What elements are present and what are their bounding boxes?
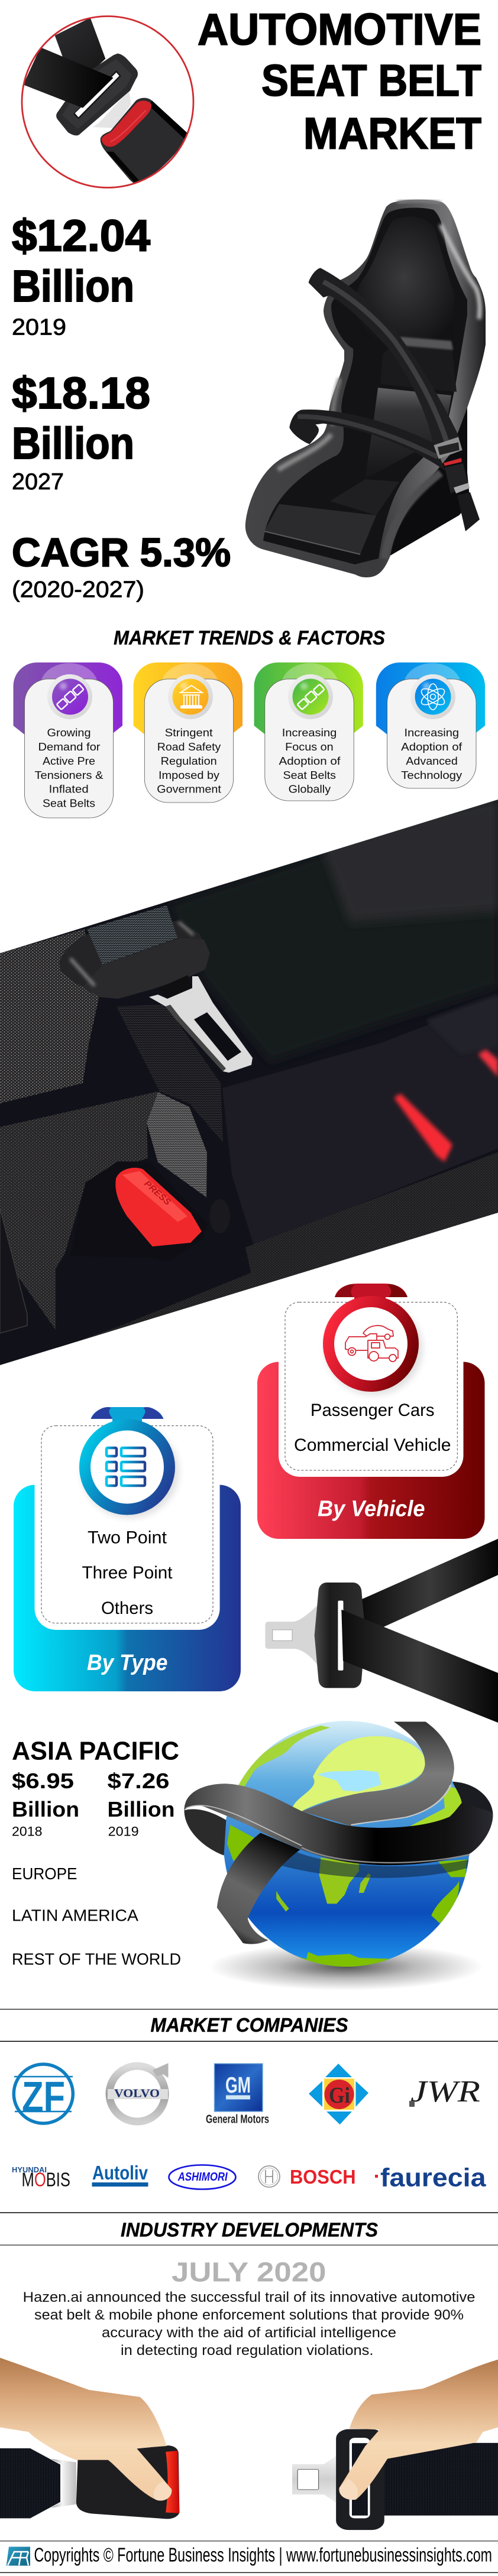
panel: trend card 3 bbox=[254, 662, 363, 801]
illustration: racing seat with belt bbox=[245, 200, 486, 577]
text: stringent regulation bbox=[157, 726, 221, 795]
logo: Gi diamond: Gi bbox=[329, 2083, 350, 2108]
heading: industry developments: INDUSTRY DEVELOPMENTS bbox=[121, 2218, 378, 2241]
stat: 2027 market size: $18.18 bbox=[12, 368, 150, 418]
icon: Fortune Business Insights logo bbox=[7, 2547, 30, 2566]
stat: CAGR: CAGR 5.3% bbox=[12, 530, 231, 575]
panel: by vehicle bbox=[257, 1284, 485, 1539]
stat: CAGR: (2020-2027) bbox=[12, 577, 144, 603]
text: vehicle types: Commercial Vehicle bbox=[294, 1435, 451, 1455]
panel: trend card 1 bbox=[13, 662, 122, 818]
heading: market companies: MARKET COMPANIES bbox=[150, 2014, 348, 2036]
icon: vehicles bbox=[345, 1326, 398, 1362]
icon: government building bbox=[180, 686, 202, 708]
logo: Hyundai Mobis: MOBIS bbox=[21, 2169, 70, 2191]
text: increasing focus: Increasing bbox=[282, 726, 337, 739]
text: vehicle types bbox=[294, 1401, 451, 1455]
text: growing demand: Demand for bbox=[38, 740, 101, 753]
text: belt types: Two Point bbox=[88, 1528, 167, 1547]
logo: General Motors: General Motors bbox=[206, 2113, 269, 2126]
illustration: belt and latch plate bbox=[265, 1539, 498, 1723]
region list bbox=[12, 1864, 181, 1968]
divider top of market companies bbox=[0, 2009, 498, 2010]
text block: development description: in detecting road regulation violations. bbox=[121, 2343, 374, 2359]
icon: seat belt buckle in red circle bbox=[22, 17, 193, 188]
illustration: globe wrapped in belt bbox=[184, 1721, 493, 1990]
logo: Gi diamond bbox=[309, 2064, 368, 2125]
divider below market companies heading bbox=[0, 2041, 498, 2042]
text: increasing focus: Seat Belts bbox=[283, 769, 336, 781]
icon: list bbox=[106, 1448, 145, 1486]
text: advanced technology bbox=[401, 726, 463, 781]
text: growing demand: Tensioners & bbox=[34, 769, 104, 781]
text: advanced technology: Adoption of bbox=[401, 740, 463, 753]
logo: Hyundai Mobis: HYUNDAI bbox=[12, 2165, 47, 2174]
text: growing demand: Seat Belts bbox=[43, 797, 95, 810]
text: growing demand: Active Pre bbox=[43, 755, 95, 767]
text: belt types bbox=[82, 1528, 173, 1618]
stat: 2019 market size bbox=[12, 210, 150, 340]
icon: belt links bbox=[56, 684, 84, 710]
text: stringent regulation: Regulation bbox=[161, 755, 217, 767]
value 2019: Billion bbox=[108, 1797, 175, 1821]
stat: 2027 market size bbox=[12, 368, 150, 495]
text: belt types: Others bbox=[101, 1599, 153, 1618]
stat: CAGR bbox=[12, 530, 231, 603]
value 2018: 2018 bbox=[12, 1824, 43, 1839]
ribbon bbox=[335, 1284, 408, 1303]
logo: Faurecia: faurecia bbox=[380, 2164, 486, 2192]
logo: Ashimori: ASHIMORI bbox=[177, 2171, 228, 2184]
title: AUTOMOTIVE bbox=[198, 5, 481, 54]
title: SEAT BELT bbox=[261, 56, 481, 105]
text: stringent regulation: Road Safety bbox=[157, 740, 221, 753]
logo: Autoliv: Autoliv bbox=[92, 2162, 148, 2184]
label on red button: PRESS bbox=[142, 1178, 173, 1207]
belt band around globe bbox=[184, 1721, 493, 1944]
stat: 2027 market size: 2027 bbox=[12, 469, 64, 495]
logo: Hyundai Mobis bbox=[12, 2165, 70, 2191]
text: vehicle types: Passenger Cars bbox=[311, 1401, 434, 1420]
label: by vehicle: By Vehicle bbox=[318, 1496, 425, 1521]
text: growing demand: Growing bbox=[47, 726, 91, 739]
illustration: right hand with tongue bbox=[292, 2360, 498, 2530]
logo: Bosch bbox=[258, 2166, 356, 2188]
logo: JWR: JWR bbox=[410, 2075, 480, 2109]
logo: ZF: ZF bbox=[22, 2074, 65, 2121]
text: growing demand: Inflated bbox=[49, 782, 89, 795]
text: advanced technology: Increasing bbox=[405, 726, 459, 739]
heading: market trends and factors: MARKET TRENDS & FACTORS bbox=[114, 626, 385, 649]
divider below footer bbox=[0, 2572, 498, 2573]
logo: Volvo: VOLVO bbox=[114, 2087, 160, 2100]
logo: General Motors bbox=[206, 2064, 269, 2126]
text: advanced technology: Technology bbox=[401, 769, 463, 781]
text: stringent regulation: Imposed by bbox=[159, 769, 220, 781]
logo: General Motors: GM bbox=[225, 2073, 251, 2098]
title bbox=[198, 5, 481, 158]
logo: Ashimori bbox=[169, 2165, 235, 2189]
icon: belt links bbox=[297, 684, 325, 710]
text: advanced technology: Advanced bbox=[406, 755, 458, 767]
stat: 2027 market size: Billion bbox=[12, 418, 134, 468]
region stats: asia pacific bbox=[12, 1736, 179, 1839]
region list: LATIN AMERICA bbox=[12, 1906, 138, 1925]
stat: 2019 market size: 2019 bbox=[12, 314, 66, 340]
ribbon bbox=[91, 1407, 163, 1425]
logo: Volvo bbox=[108, 2063, 168, 2122]
text block: development description: Hazen.ai announced the successful trail of its innovative automotive bbox=[23, 2289, 475, 2305]
photo band: seat belts in car bbox=[0, 798, 498, 1389]
region list: EUROPE bbox=[12, 1864, 77, 1883]
text block: development description: seat belt & mobile phone enforcement solutions that provide 90% bbox=[34, 2307, 464, 2323]
text block: development description bbox=[23, 2289, 475, 2359]
text: increasing focus: Focus on bbox=[285, 740, 334, 753]
logo: ZF bbox=[14, 2064, 73, 2123]
region stats: asia pacific: ASIA PACIFIC bbox=[12, 1736, 179, 1766]
icon: atom bbox=[419, 684, 447, 710]
text block: development description: accuracy with the aid of artificial intelligence bbox=[102, 2325, 396, 2341]
value 2018: $6.95 bbox=[12, 1769, 74, 1793]
text: belt types: Three Point bbox=[82, 1563, 173, 1583]
label: by type: By Type bbox=[87, 1651, 168, 1675]
shoulder and lap belt bbox=[289, 268, 463, 471]
text: increasing focus: Globally bbox=[289, 782, 331, 795]
panel: trend card 4 bbox=[376, 662, 485, 788]
value 2019: 2019 bbox=[108, 1824, 139, 1839]
text: increasing focus: Adoption of bbox=[279, 755, 341, 767]
date: July 2020: JULY 2020 bbox=[172, 2256, 326, 2287]
stat: 2019 market size: Billion bbox=[12, 261, 134, 311]
title: MARKET bbox=[303, 109, 481, 158]
text: growing demand bbox=[34, 726, 104, 810]
divider below industry developments heading bbox=[0, 2244, 498, 2246]
panel: trend card 2 bbox=[134, 662, 242, 803]
text: increasing focus bbox=[279, 726, 341, 795]
value 2019 bbox=[108, 1769, 175, 1839]
value 2018 bbox=[12, 1769, 79, 1839]
panel: by type bbox=[14, 1407, 241, 1691]
region list: REST OF THE WORLD bbox=[12, 1950, 181, 1968]
text: stringent regulation: Stringent bbox=[165, 726, 213, 739]
value 2019: $7.26 bbox=[108, 1769, 169, 1793]
stat: 2019 market size: $12.04 bbox=[12, 210, 150, 260]
logo: Bosch: BOSCH bbox=[290, 2166, 356, 2188]
text: stringent regulation: Government bbox=[157, 782, 221, 795]
illustration: left hand with buckle bbox=[0, 2358, 179, 2519]
value 2018: Billion bbox=[12, 1797, 79, 1821]
